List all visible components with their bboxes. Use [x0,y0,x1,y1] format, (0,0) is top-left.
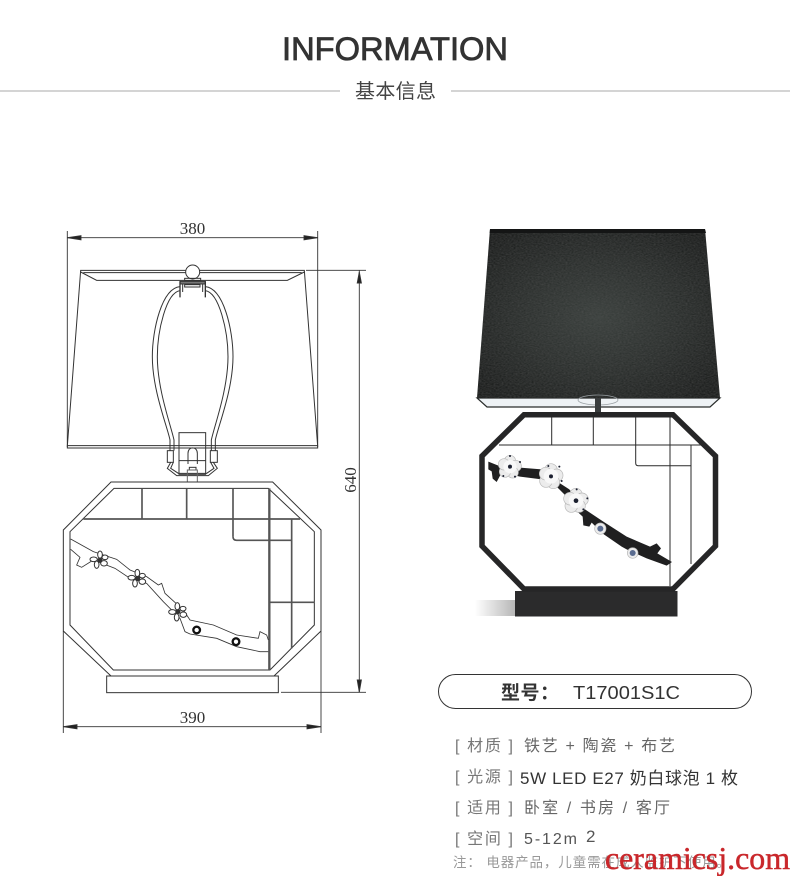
line drawing: octagonal frame and base [63,470,321,693]
spec row: material: 铁艺 + 陶瓷 + 布艺 [524,737,675,755]
photo: octagonal frame [482,415,716,589]
photo: blossoms [498,455,638,558]
spec row: light source: 5W LED E27 奶白球泡 1 枚 [520,769,738,788]
dimension: width 380: 380 [180,219,205,238]
photo: base [515,591,678,616]
photo: branch [488,455,672,566]
spec row: space: 2 [586,827,595,846]
spec row: space: 5-12m [524,831,577,848]
spec row: suitable rooms [455,799,670,817]
dimension: width 390 [63,631,321,733]
spec row: suitable rooms: [ 适用 ] [455,799,513,817]
spec row: material [455,737,675,755]
spec row: suitable rooms: 卧室 / 书房 / 客厅 [524,799,670,817]
subtitle with rules: 基本信息 [355,80,436,103]
dimension: width 380 [67,219,318,447]
model number pill: 型号： [501,682,559,704]
photo: thin grid lines [499,417,705,586]
title: INFORMATION [282,31,508,67]
watermark: ceramicsj.com [605,840,790,876]
product photo of lamp [470,225,725,616]
spec row: space [455,827,595,848]
spec row: material: [ 材质 ] [455,737,513,755]
dimension: height 640: 640 [341,467,360,493]
photo: base shadow [475,600,516,616]
dimension: width 390: 390 [180,708,205,727]
technical line drawing of lamp [63,219,366,733]
dimension: height 640 [281,270,366,692]
spec row: space: [ 空间 ] [455,830,513,848]
photo: lampshade [470,225,725,414]
model number pill [438,674,752,708]
footnote: 注： 电器产品，儿童需在成人监护下使用。 [453,854,730,870]
model number pill: T17001S1C [573,682,680,703]
spec row: light source: [ 光源 ] [455,768,513,786]
line drawing: lampshade and harp [67,265,318,476]
